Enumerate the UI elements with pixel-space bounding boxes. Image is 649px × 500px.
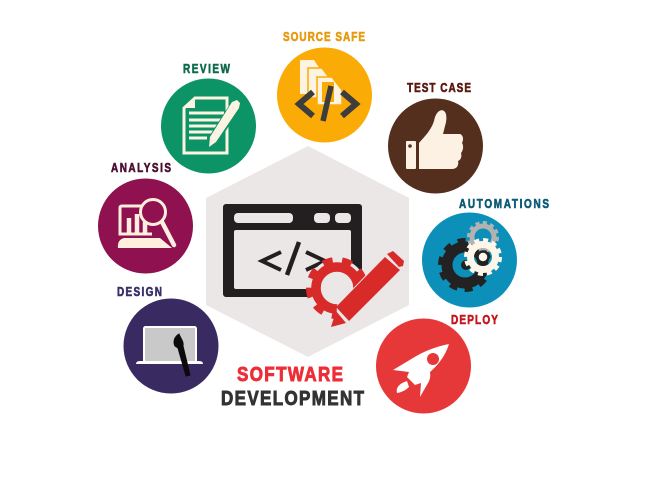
panel: analysis [98, 162, 193, 274]
panel: test case [388, 82, 483, 194]
panel: source safe: SOURCE SAFE [283, 31, 365, 44]
panel: review: REVIEW [183, 63, 230, 76]
title: software development [221, 363, 365, 409]
panel: design: DESIGN [117, 286, 162, 299]
central hexagon panel [206, 146, 409, 357]
title: software development: SOFTWARE [237, 363, 343, 385]
panel: deploy: DEPLOY [451, 314, 498, 327]
panel: test case: TEST CASE [407, 82, 471, 95]
title: software development: DEVELOPMENT [221, 387, 365, 409]
panel: review [161, 63, 256, 174]
icon: code window with gear and pencil [223, 204, 408, 332]
panel: automations [422, 198, 549, 308]
panel: deploy [376, 314, 498, 414]
panel: automations: AUTOMATIONS [459, 198, 549, 211]
panel: design [117, 286, 218, 394]
panel: analysis: ANALYSIS [111, 162, 171, 175]
panel: source safe [277, 31, 372, 142]
